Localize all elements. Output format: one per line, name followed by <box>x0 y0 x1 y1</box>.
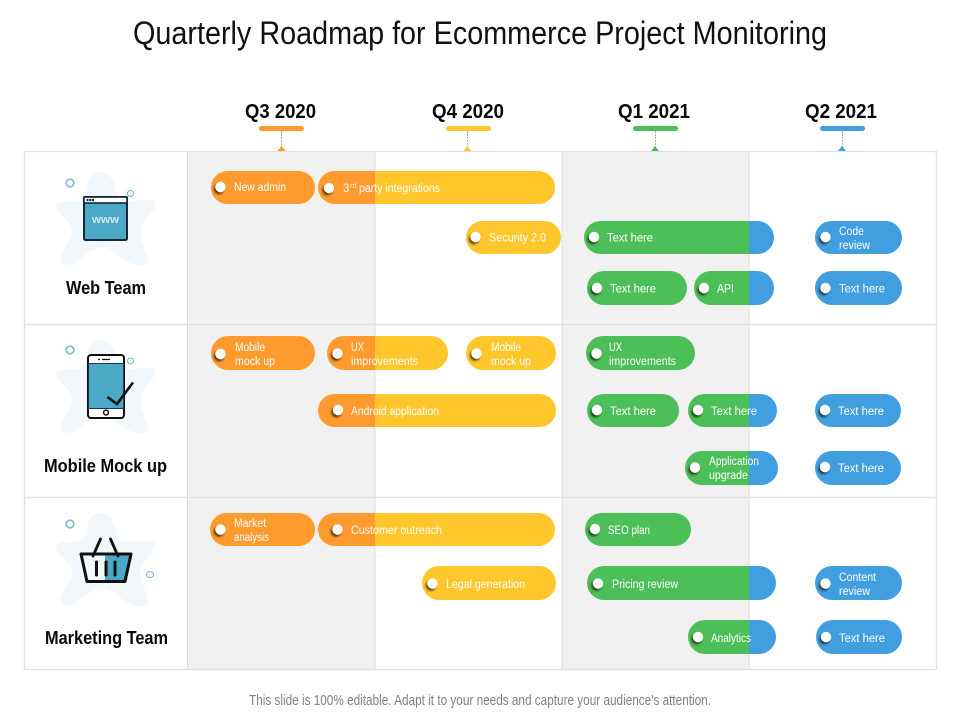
bar: Text here (mobile, Q1): Text here <box>610 406 656 418</box>
bar: UX improvements (Q1): UX <box>609 342 622 354</box>
bar: API <box>694 271 774 305</box>
bar: Market analysis: Market <box>234 518 267 530</box>
bar: Text here (marketing, Q2) <box>816 620 902 654</box>
bar: Text here (web, short) <box>587 271 687 305</box>
footer note: This slide is 100% editable. Adapt it to your needs and capture your audience's attention. <box>249 692 711 709</box>
bar: Text here (mobile, Q2 lower): Text here <box>838 463 884 475</box>
bar: Text here (mobile, Q2 lower) <box>815 451 901 485</box>
bar: Application upgrade <box>685 451 778 485</box>
bar: Content review: review <box>839 586 871 598</box>
bar: Code review <box>815 221 902 254</box>
bar: Text here (web, short): Text here <box>610 284 656 296</box>
bar: Code review: Code <box>839 226 864 238</box>
bar: SEO plan: SEO plan <box>608 525 650 537</box>
quarter header: Q4 2020: Q4 2020 <box>432 101 504 123</box>
roadmap grid <box>24 152 936 670</box>
bar: Text here (marketing, Q2): Text here <box>839 633 885 645</box>
icon: smartphone with check <box>56 340 155 433</box>
bar: Content review: Content <box>839 572 877 584</box>
bar: Application upgrade: upgrade <box>709 470 748 482</box>
bar: Text here (mobile, Q1-Q2): Text here <box>711 406 757 418</box>
bar: UX improvements (Q1): improvements <box>609 356 676 368</box>
bar: Mobile mock up (Q4) <box>466 336 556 370</box>
row label: Marketing Team: Marketing Team <box>45 628 168 648</box>
bar: Text here (mobile, Q1-Q2) <box>688 394 777 427</box>
bar: Android application <box>318 394 556 427</box>
row label: Mobile Mock up <box>44 340 167 476</box>
bar: Legal generation: Legal generation <box>446 579 525 591</box>
bar: UX improvements (Q3-Q4): improvements <box>351 356 418 368</box>
bar: Text here (web, long): Text here <box>607 232 653 244</box>
bar: Application upgrade: Application <box>709 456 759 468</box>
row label: Web Team <box>56 172 155 298</box>
bar: Android application: Android application <box>351 406 439 418</box>
bar: Text here (web, long) <box>584 221 774 254</box>
bar: Market analysis: analysis <box>234 532 269 544</box>
bar: Mobile mock up (Q3) <box>211 336 315 370</box>
quarter header: Q2 2021 <box>805 101 877 151</box>
row label: Marketing Team <box>45 513 168 648</box>
bar: Mobile mock up (Q3): Mobile <box>235 342 265 354</box>
bar: Content review <box>815 566 902 600</box>
bar: Security 2.0: Security 2.0 <box>489 232 546 244</box>
bar: UX improvements (Q3-Q4) <box>327 336 448 370</box>
bar: SEO plan <box>585 513 691 546</box>
bar: Mobile mock up (Q3): mock up <box>235 356 275 368</box>
bar: UX improvements (Q3-Q4): UX <box>351 342 364 354</box>
bar: Text here (web, Q2): Text here <box>839 284 885 296</box>
bar: Text here (mobile, Q2) <box>815 394 901 427</box>
bar: Text here (mobile, Q1) <box>587 394 679 427</box>
bar: API: API <box>717 284 734 296</box>
bar: Security 2.0 <box>466 221 561 254</box>
bar: Mobile mock up (Q4): mock up <box>491 356 531 368</box>
bar: 3rd party integrations <box>318 171 555 204</box>
row label: Mobile Mock up: Mobile Mock up <box>44 456 167 476</box>
bar: 3rd party integrations: party integrations <box>359 183 440 195</box>
bar: Analytics: Analytics <box>711 633 751 645</box>
bar: 3rd party integrations: rd <box>350 181 357 190</box>
quarter header: Q1 2021: Q1 2021 <box>618 101 690 123</box>
quarter header: Q4 2020 <box>432 101 504 151</box>
bar: Pricing review: Pricing review <box>612 579 679 591</box>
bar: Mobile mock up (Q4): Mobile <box>491 342 521 354</box>
quarter header: Q3 2020: Q3 2020 <box>245 101 316 123</box>
bar: Legal generation <box>422 566 556 600</box>
quarter header: Q3 2020 <box>245 101 316 151</box>
row label: Web Team: Web Team <box>66 278 146 298</box>
icon: browser window: www <box>91 214 119 226</box>
bar: Customer outreach: Customer outreach <box>351 525 442 537</box>
bar: New admin: New admin <box>234 182 286 194</box>
bar: Code review: review <box>839 240 871 252</box>
title: Quarterly Roadmap for Ecommerce Project Monitoring <box>133 15 827 51</box>
bar: New admin <box>211 171 315 204</box>
bar: UX improvements (Q1) <box>586 336 695 370</box>
bar: Pricing review <box>587 566 776 600</box>
bar: Market analysis <box>210 513 315 546</box>
bar: Customer outreach <box>318 513 555 546</box>
icon: shopping basket <box>56 513 155 606</box>
quarter header: Q1 2021 <box>618 101 690 151</box>
bar: Text here (mobile, Q2): Text here <box>838 406 884 418</box>
bar: Analytics <box>688 620 776 654</box>
bar: Text here (web, Q2) <box>815 271 902 305</box>
bar: 3rd party integrations: 3 <box>343 183 349 195</box>
quarter header: Q2 2021: Q2 2021 <box>805 101 877 123</box>
